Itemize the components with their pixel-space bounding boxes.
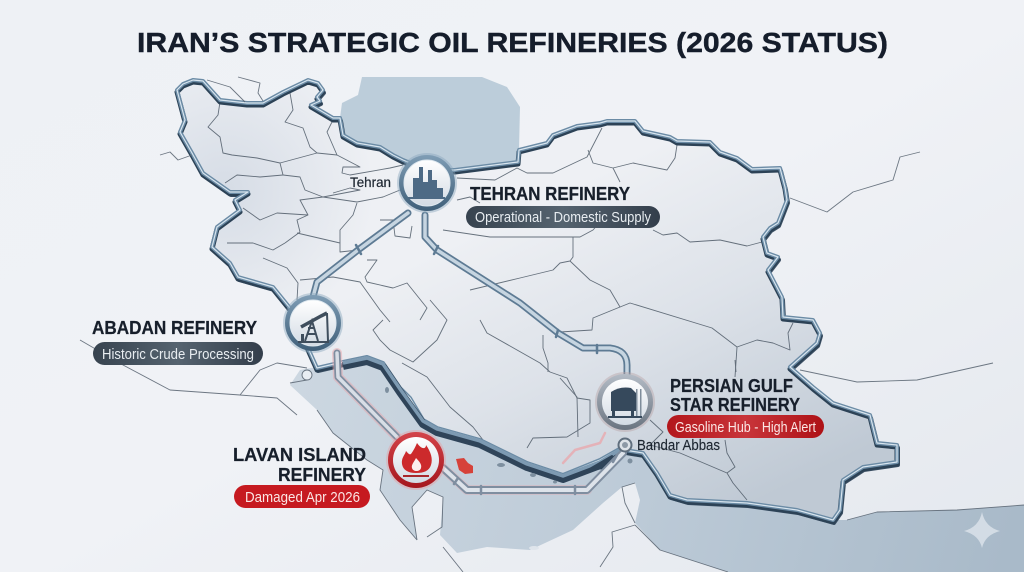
label: lavan island refinery: Damaged Apr 2026 [245,489,360,506]
label: persian gulf star refinery: Gasoline Hub - High Alert [675,419,817,436]
label: persian gulf star refinery: STAR REFINERY [670,395,800,415]
refinery node: tehran [397,153,457,213]
icon: refinery towers [408,167,445,199]
label: abadan refinery: Historic Crude Processing [102,346,254,363]
map of iran [150,60,898,523]
title: IRAN’S STRATEGIC OIL REFINERIES (2026 STATUS) [137,27,888,58]
bandar abbas node [618,438,632,452]
icon: storage tank [608,388,642,418]
label: persian gulf star refinery [667,376,824,438]
city label: bandar abbas: Bandar Abbas [637,437,720,454]
raised southern coast [343,358,623,479]
label: abadan refinery: ABADAN REFINERY [92,318,257,338]
label: lavan island refinery: REFINERY [278,465,366,485]
pipeline: tehran to persian gulf star [425,215,627,375]
refinery node: persian gulf star [595,372,655,432]
icon: oil pumpjack [298,313,329,342]
neighbouring country borders [80,77,1024,572]
internal province borders [208,93,793,500]
caspian sea [340,77,520,170]
persian gulf and gulf of oman [290,362,1024,572]
icon: damaged lavan island [456,458,473,474]
pipeline: abadan to lavan [337,353,397,437]
city label: tehran: Tehran [350,174,391,190]
pipeline: tehran to abadan [313,213,408,297]
refinery node: lavan island [386,430,446,490]
icon: flame [402,443,432,477]
gulf islands [385,387,632,550]
label: tehran refinery [466,184,660,228]
label: abadan refinery [92,318,263,365]
label: lavan island refinery: LAVAN ISLAND [233,445,366,465]
raised border: shadow, body, highlight [177,80,897,522]
label: lavan island refinery [233,445,370,508]
icon: sparkle watermark [964,512,1000,548]
refinery node: abadan [283,293,343,353]
label: persian gulf star refinery: PERSIAN GULF [670,376,793,396]
pipelines [313,213,627,494]
red glow routes [337,353,397,437]
label: tehran refinery: TEHRAN REFINERY [470,184,630,204]
pipeline: lavan to bandar abbas [443,453,623,494]
label: tehran refinery: Operational - Domestic Supply [475,209,651,226]
